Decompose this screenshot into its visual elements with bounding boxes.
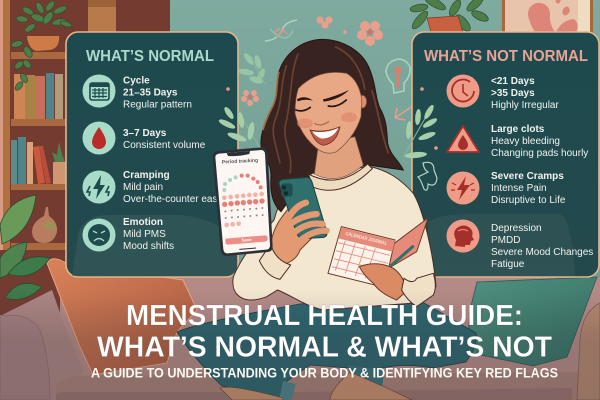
sleeve cuff left xyxy=(259,244,291,279)
row: cycle length xyxy=(446,74,559,111)
row text: Over-the-counter ease xyxy=(123,194,223,205)
row text: Severe Mood Changes xyxy=(491,247,593,258)
row: cramping xyxy=(82,170,223,205)
blush xyxy=(297,118,313,128)
row text: >35 Days xyxy=(491,88,535,99)
icon: clock xyxy=(446,74,480,108)
sofa back xyxy=(0,277,600,377)
row: cycle xyxy=(82,74,192,110)
hand and props xyxy=(213,147,435,307)
icon: calendar xyxy=(82,74,116,108)
row: clots xyxy=(447,124,588,159)
row text: Changing pads hourly xyxy=(491,148,588,159)
eyes xyxy=(296,100,346,111)
right panel background xyxy=(412,32,599,277)
row text: 3–7 Days xyxy=(123,128,167,139)
bare feet xyxy=(220,372,412,400)
hand holding phone xyxy=(271,207,317,265)
panel: what's normal xyxy=(66,32,238,277)
row text: Large clots xyxy=(491,124,545,135)
panel: what's not normal xyxy=(412,32,599,277)
hair mass xyxy=(261,39,403,212)
icon: head with brain xyxy=(446,220,480,252)
title line one: MENSTRUAL HEALTH GUIDE: xyxy=(126,300,523,332)
row: duration xyxy=(82,122,206,154)
row text: Mild PMS xyxy=(123,229,166,240)
app title: Period tracking xyxy=(222,158,258,166)
bookcase lower wall xyxy=(0,250,60,315)
left panel heading: WHAT’S NORMAL xyxy=(86,48,214,65)
row text: Heavy bleeding xyxy=(491,136,560,147)
row text: Emotion xyxy=(123,217,163,228)
woman xyxy=(213,39,436,310)
wall plant and pot, top right xyxy=(410,0,490,34)
sprig and dots over panel edges xyxy=(218,87,438,159)
icon: sad face xyxy=(82,218,116,252)
hand holding journal xyxy=(359,264,406,300)
calendar journal xyxy=(328,218,428,287)
neck xyxy=(314,137,363,179)
teal cushion xyxy=(467,277,597,366)
row text: 21–35 Days xyxy=(123,88,178,98)
row: depression xyxy=(446,220,593,270)
teeth xyxy=(312,128,338,139)
icon: warning triangle xyxy=(447,126,479,152)
row: severe cramps xyxy=(446,171,566,206)
row text: Intense Pain xyxy=(491,183,547,194)
mouth xyxy=(310,127,340,145)
left warm hair edge xyxy=(263,72,279,130)
subtitle: A GUIDE TO UNDERSTANDING YOUR BODY & IDENTIFYING KEY RED FLAGS xyxy=(91,366,558,380)
sofa left arm xyxy=(0,290,84,400)
fingers xyxy=(289,203,327,241)
green phone xyxy=(279,177,327,239)
shelf plant xyxy=(10,0,72,92)
row text: Regular pattern xyxy=(123,100,192,110)
wall background xyxy=(0,0,600,290)
title block xyxy=(91,300,558,380)
sofa seat front xyxy=(54,388,572,400)
head and hair xyxy=(261,39,403,212)
row text: Depression xyxy=(491,223,542,234)
sofa seat xyxy=(50,372,600,400)
sweater collar xyxy=(308,164,372,190)
icon: pain bolt xyxy=(446,172,480,204)
wall picture of anatomy xyxy=(502,0,593,33)
sweater right cuff xyxy=(402,273,435,307)
row text: Mild pain xyxy=(123,182,163,193)
sofa right arm xyxy=(577,303,600,400)
bookcase xyxy=(0,0,170,300)
row text: Cycle xyxy=(123,76,150,86)
journal label: CALENDAR JOURNAL xyxy=(345,231,388,247)
floating flowers and sprigs on wall xyxy=(238,16,411,120)
right panel heading: WHAT’S NOT NORMAL xyxy=(424,48,588,65)
icon: blood drop xyxy=(82,122,116,154)
uterus doodle xyxy=(418,162,437,190)
orange cushion xyxy=(47,259,197,375)
row text: Fatigue xyxy=(491,259,525,270)
sweater body xyxy=(233,167,436,310)
jeans xyxy=(177,296,476,400)
large foreground plant xyxy=(0,195,50,300)
face xyxy=(295,72,362,153)
app button: Save xyxy=(241,237,252,243)
bottom shade behind title xyxy=(0,290,600,400)
row text: <21 Days xyxy=(491,76,535,87)
nose xyxy=(314,121,329,125)
sofa left arm front xyxy=(0,315,50,400)
app phone xyxy=(213,147,273,256)
icon: lightning bolts xyxy=(82,170,116,204)
hair highlight strands xyxy=(273,47,388,173)
row: emotion xyxy=(82,217,174,252)
sofa silhouette through right panel xyxy=(428,214,575,276)
left panel background xyxy=(66,32,238,277)
row text: Cramping xyxy=(123,170,170,181)
row text: Mood shifts xyxy=(123,241,174,252)
row text: Severe Cramps xyxy=(491,171,564,182)
blush right xyxy=(341,112,357,122)
row text: Highly Irregular xyxy=(491,100,559,111)
row text: PMDD xyxy=(491,235,520,246)
ear xyxy=(358,95,367,108)
title line two: WHAT’S NORMAL & WHAT’S NOT xyxy=(97,332,552,364)
DNA doodle xyxy=(265,20,297,41)
row text: Consistent volume xyxy=(123,140,206,151)
sofa silhouette through left panel xyxy=(72,215,237,276)
eyebrows xyxy=(297,90,349,102)
row text: Disruptive to Life xyxy=(491,195,566,206)
